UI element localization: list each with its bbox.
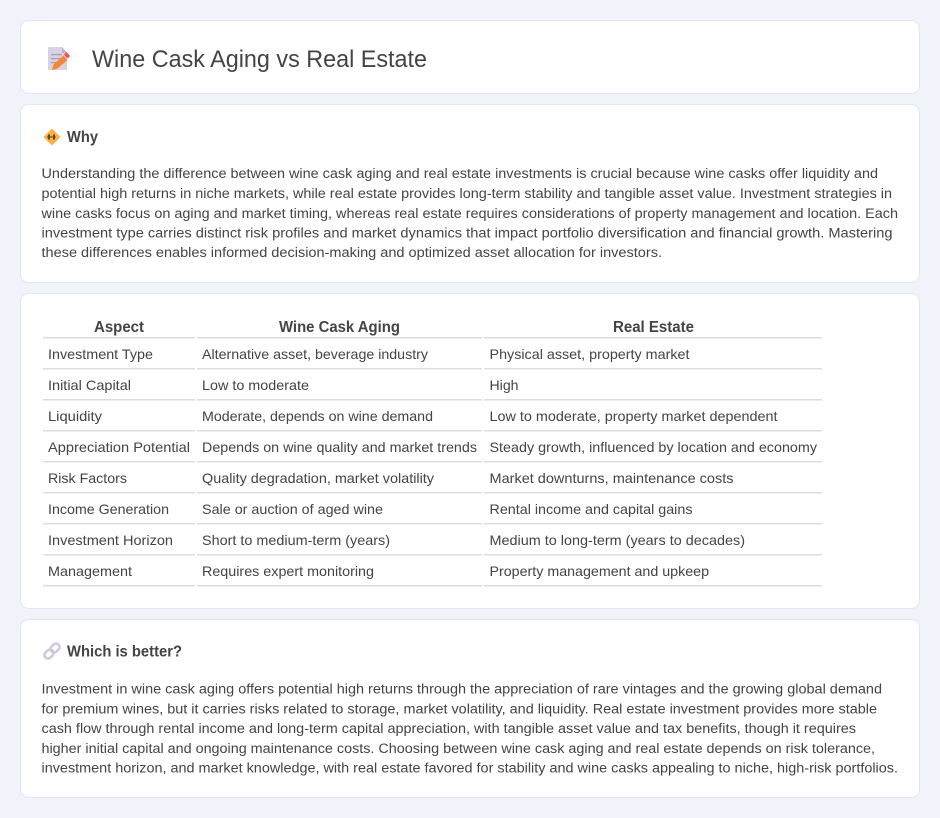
row: investment type: Physical asset, property market bbox=[490, 346, 690, 362]
row: investment horizon bbox=[48, 532, 745, 548]
row: liquidity bbox=[48, 408, 778, 424]
text block: why paragraph: these differences enables informed decision-making and optimized asset allocation for investors. bbox=[42, 245, 662, 261]
row: investment horizon: Investment Horizon bbox=[48, 532, 173, 548]
table header row: Aspect bbox=[94, 319, 145, 336]
text block: which is better paragraph: cash flow through rental income and long-term capital appreciation, with tangible asset value and tax benefits, though it requires bbox=[42, 721, 856, 737]
row: management: Requires expert monitoring bbox=[202, 563, 374, 579]
icon: chain link bbox=[43, 642, 61, 660]
text block: which is better paragraph: higher initial capital and ongoing maintenance costs. Choosing between wine cask aging and real estate depends on risk tolerance, bbox=[42, 741, 875, 757]
table header row: Wine Cask Aging bbox=[279, 319, 400, 336]
row: income generation bbox=[48, 501, 692, 517]
row: income generation: Sale or auction of aged wine bbox=[202, 501, 383, 517]
row: liquidity: Moderate, depends on wine demand bbox=[202, 408, 433, 424]
row: appreciation potential: Depends on wine quality and market trends bbox=[202, 439, 477, 455]
row: initial capital: Initial Capital bbox=[48, 377, 131, 393]
text block: which is better paragraph: Investment in wine cask aging offers potential high returns through the appreciation of rare vintages and the growing global demand bbox=[42, 682, 882, 698]
row: risk factors bbox=[48, 470, 734, 486]
heading: why: Why bbox=[67, 129, 98, 146]
row: appreciation potential bbox=[48, 439, 817, 455]
row: income generation: Income Generation bbox=[48, 501, 169, 517]
row: liquidity: Liquidity bbox=[48, 408, 102, 424]
title: Wine Cask Aging vs Real Estate bbox=[92, 46, 427, 73]
text block: why paragraph bbox=[40, 166, 898, 261]
row: investment horizon: Medium to long-term (years to decades) bbox=[490, 532, 745, 548]
text block: why paragraph: Understanding the difference between wine cask aging and real estate investments is crucial because wine casks offer liquidity and bbox=[42, 166, 878, 182]
text block: which is better paragraph: for premium wines, but it carries risks related to storage, market volatility, and liquidity. Real estate investment provides more stable bbox=[42, 702, 877, 718]
text block: which is better paragraph bbox=[42, 682, 898, 776]
heading: which is better: Which is better? bbox=[67, 644, 182, 660]
row: management: Property management and upkeep bbox=[490, 563, 709, 579]
text block: why paragraph: potential high returns in niche markets, while real estate provides long-term stability and tangible asset value. Investment strategies in bbox=[42, 186, 892, 202]
text block: which is better paragraph: investment horizon, and market knowledge, with real estate favored for stability and wine casks appealing to niche, high-risk portfolios. bbox=[42, 760, 898, 776]
row: investment horizon: Short to medium-term (years) bbox=[202, 532, 390, 548]
icon: document with pencil bbox=[48, 47, 70, 70]
row: income generation: Rental income and capital gains bbox=[490, 501, 692, 517]
icon: warning diamond bbox=[44, 128, 60, 146]
table header row bbox=[94, 319, 694, 336]
row: appreciation potential: Steady growth, influenced by location and economy bbox=[490, 439, 817, 455]
panel: which is better bbox=[20, 620, 920, 798]
row: management bbox=[48, 563, 709, 579]
row: investment type bbox=[48, 346, 690, 362]
row: appreciation potential: Appreciation Potential bbox=[48, 439, 190, 455]
row: management: Management bbox=[48, 563, 132, 579]
table header row: Real Estate bbox=[613, 319, 694, 336]
row: initial capital bbox=[48, 377, 518, 393]
row: initial capital: High bbox=[490, 377, 518, 393]
row: risk factors: Market downturns, maintenance costs bbox=[490, 470, 734, 486]
text block: why paragraph: wine casks focus on aging and market timing, whereas real estate requires considerations of property management and location. Each bbox=[40, 206, 898, 222]
panel: title header bbox=[20, 20, 920, 94]
row: liquidity: Low to moderate, property market dependent bbox=[490, 408, 778, 424]
row: initial capital: Low to moderate bbox=[202, 377, 309, 393]
panel: comparison table bbox=[20, 294, 920, 608]
row: risk factors: Quality degradation, market volatility bbox=[202, 470, 434, 486]
text block: why paragraph: investment type carries distinct risk profiles and market dynamics that impact portfolio diversification and financial growth. Mastering bbox=[42, 226, 892, 242]
panel: why bbox=[20, 104, 920, 282]
row: investment type: Alternative asset, beverage industry bbox=[202, 346, 428, 362]
row: investment type: Investment Type bbox=[48, 346, 153, 362]
row: risk factors: Risk Factors bbox=[48, 470, 127, 486]
